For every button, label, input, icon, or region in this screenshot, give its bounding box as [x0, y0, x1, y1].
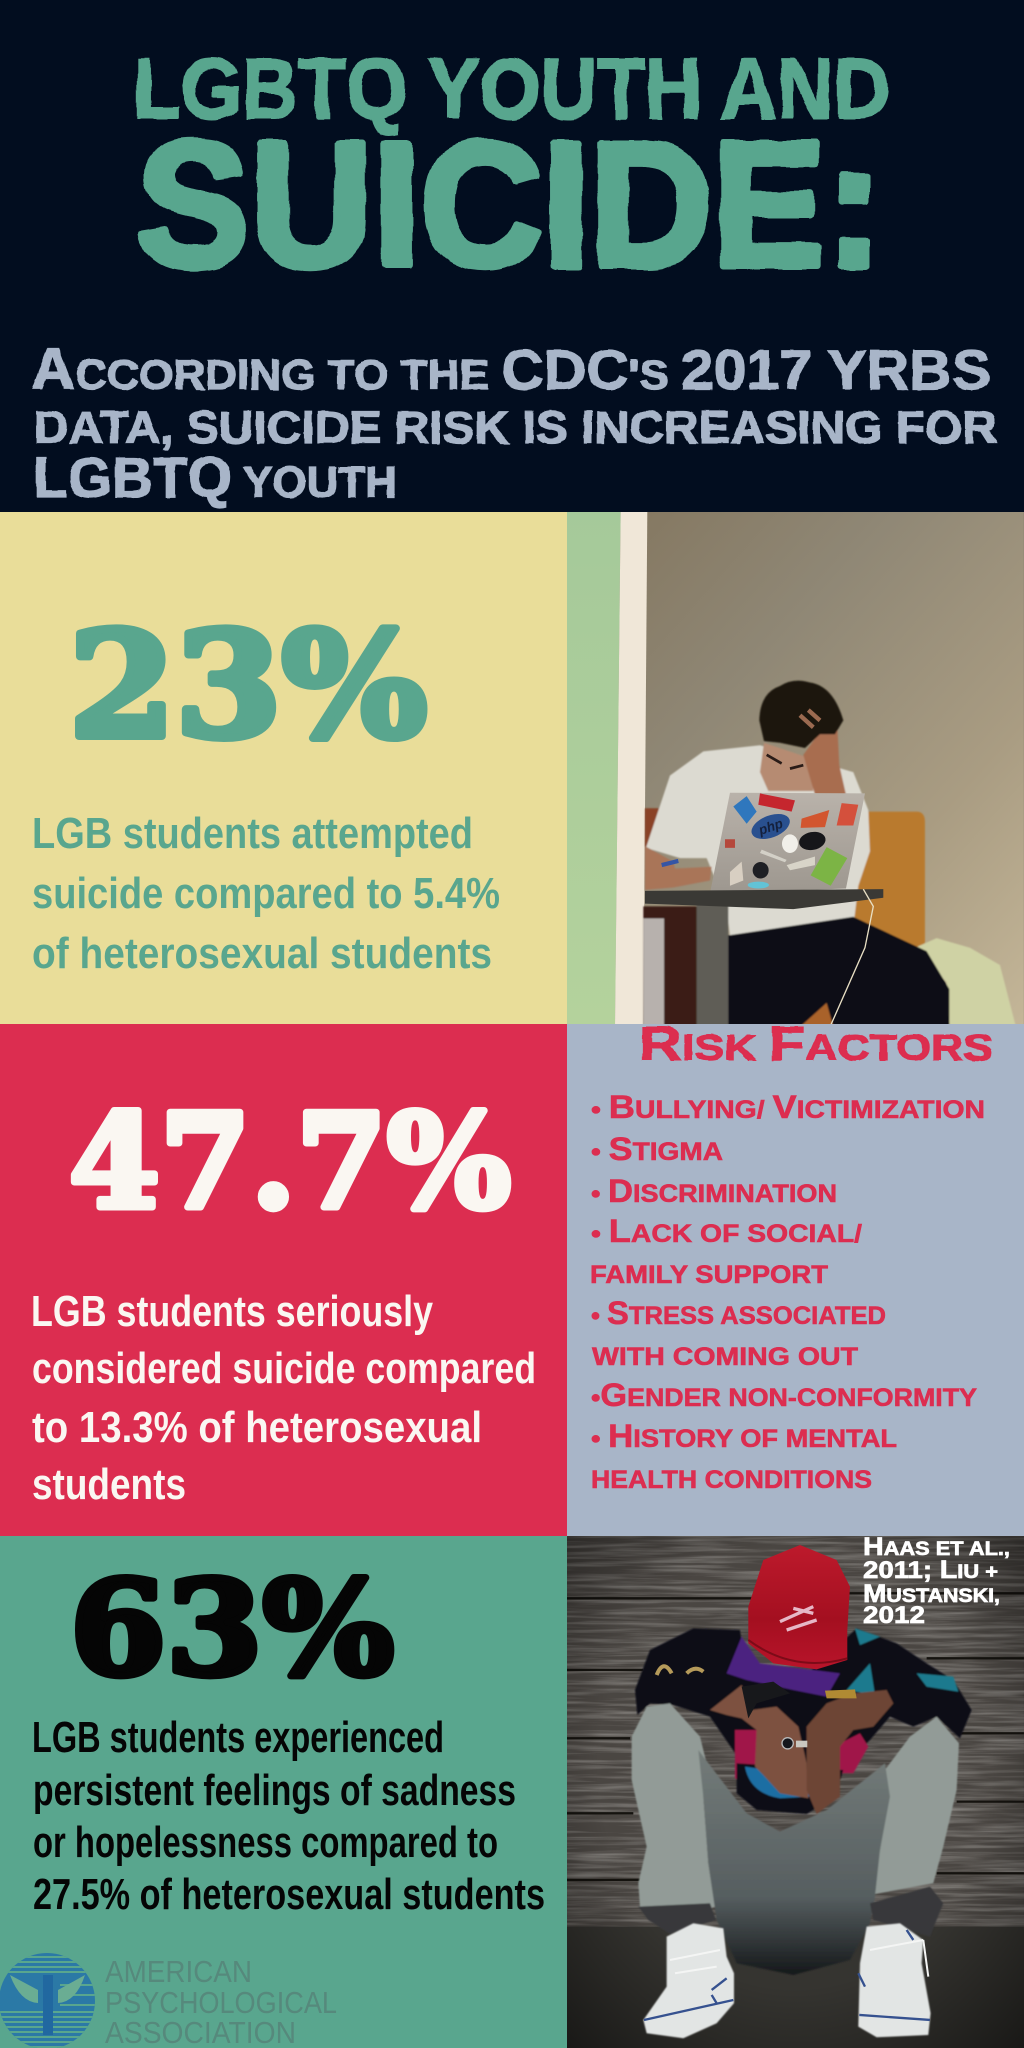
logo wordmark [105, 1954, 337, 2048]
text block: attempted suicide: suicide compared to 5.4% [32, 869, 500, 918]
list: risk factor items: • STRESS ASSOCIATED [591, 1295, 886, 1331]
stat: 63%: 63% [70, 1552, 394, 1705]
text block: considered suicide: LGB students seriously [31, 1287, 433, 1336]
text block: sadness or hopelessness: or hopelessness compared to [33, 1818, 498, 1867]
text block: considered suicide: considered suicide compared [32, 1344, 536, 1393]
list: risk factor items [590, 1089, 985, 1494]
panel: header [0, 0, 1024, 512]
text block: sadness or hopelessness: 27.5% of heterosexual students [33, 1870, 545, 1919]
text block: sadness or hopelessness: persistent feelings of sadness [33, 1766, 516, 1815]
list: risk factor items: • STIGMA [591, 1131, 723, 1167]
icon: APA psi emblem [0, 1952, 96, 2048]
subtitle: LGBTQ YOUTH [33, 446, 397, 510]
stat: 23%: 23% [69, 601, 427, 771]
heading: risk factors: RISK FACTORS [639, 1018, 993, 1071]
panel: 63 percent sadness or hopelessness [0, 1536, 567, 2048]
list: risk factor items: • BULLYING/ VICTIMIZATION [591, 1089, 985, 1125]
text block: attempted suicide: LGB students attempted [32, 809, 473, 858]
text block: considered suicide [31, 1287, 536, 1509]
list: risk factor items: • LACK OF SOCIAL/ [591, 1213, 862, 1249]
subtitle [31, 337, 997, 510]
panel: 47.7 percent considered suicide [0, 1024, 567, 1536]
text block: attempted suicide: of heterosexual students [32, 929, 492, 978]
photo: young man in red cap sitting against wood wall [567, 1533, 1024, 2048]
logo wordmark: AMERICAN [105, 1954, 252, 1989]
list: risk factor items: • HISTORY OF MENTAL [591, 1418, 897, 1454]
subtitle: ACCORDING TO THE CDC'S 2017 YRBS [31, 337, 991, 402]
subtitle: DATA, SUICIDE RISK IS INCREASING FOR [34, 402, 997, 453]
text block: sadness or hopelessness: LGB students experienced [32, 1713, 444, 1762]
citation: HAAS ET AL., [863, 1533, 1010, 1561]
panel: 23 percent attempted suicide [0, 512, 567, 1024]
citation: 2012 [863, 1602, 925, 1629]
text block: sadness or hopelessness [32, 1713, 545, 1919]
title line: Suicide: SUICIDE: [137, 105, 882, 304]
citation [864, 1537, 1009, 1624]
list: risk factor items: • DISCRIMINATION [591, 1173, 837, 1209]
text block: attempted suicide [32, 809, 500, 978]
panel: risk factors [567, 1018, 1024, 1536]
citation: 2011; LIU + [863, 1556, 998, 1584]
logo: American Psychological Association [0, 1952, 337, 2048]
text block: considered suicide: to 13.3% of heterosexual [32, 1403, 482, 1452]
list: risk factor items: •GENDER NON-CONFORMITY [591, 1377, 977, 1413]
citation: MUSTANSKI, [863, 1580, 1000, 1608]
list: risk factor items: WITH COMING OUT [592, 1343, 858, 1371]
photo: stressed student at laptop [567, 510, 1024, 1029]
list: risk factor items: FAMILY SUPPORT [590, 1261, 828, 1289]
text block: considered suicide: students [32, 1460, 186, 1509]
title line: LGBTQ Youth and: LGBTQ YOUTH AND [133, 42, 890, 137]
list: risk factor items: HEALTH CONDITIONS [591, 1466, 872, 1494]
logo wordmark: PSYCHOLOGICAL [105, 1985, 337, 2020]
photo: stressed student at laptop: php [756, 816, 785, 838]
stat: 47.7%: 47.7% [69, 1085, 511, 1238]
